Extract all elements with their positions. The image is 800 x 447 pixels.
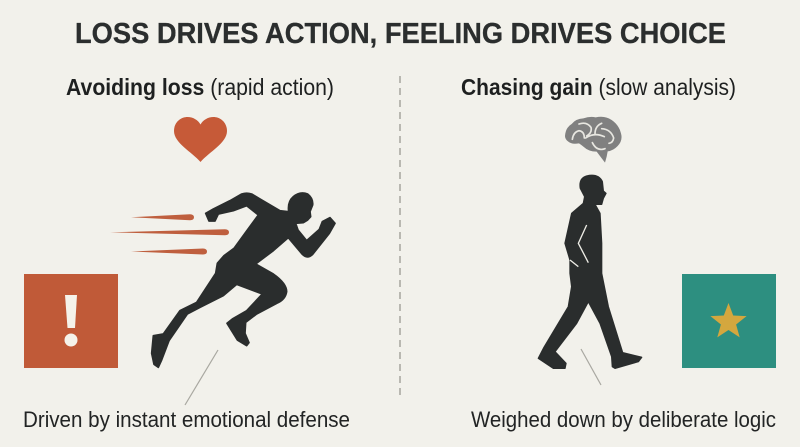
- panel: chasing gain: [461, 74, 776, 432]
- icon: warning square: [24, 274, 118, 368]
- heading: chasing gain: Chasing gain (slow analysis): [461, 74, 736, 100]
- icon: speed lines: [110, 214, 229, 254]
- figure: running person: [152, 193, 335, 367]
- caption: deliberate logic: Weighed down by deliberate logic: [471, 407, 776, 432]
- title: LOSS DRIVES ACTION, FEELING DRIVES CHOICE: [75, 18, 726, 50]
- leader line: [185, 350, 218, 405]
- panel: avoiding loss: [23, 74, 350, 432]
- icon: star square: [682, 274, 776, 368]
- icon: brain: [565, 117, 622, 163]
- caption: emotional defense: Driven by instant emotional defense: [23, 407, 350, 432]
- icon: heart: [174, 117, 227, 162]
- heading: avoiding loss: Avoiding loss (rapid action): [66, 74, 334, 100]
- figure: walking person: [538, 175, 642, 368]
- leader line: [581, 349, 601, 385]
